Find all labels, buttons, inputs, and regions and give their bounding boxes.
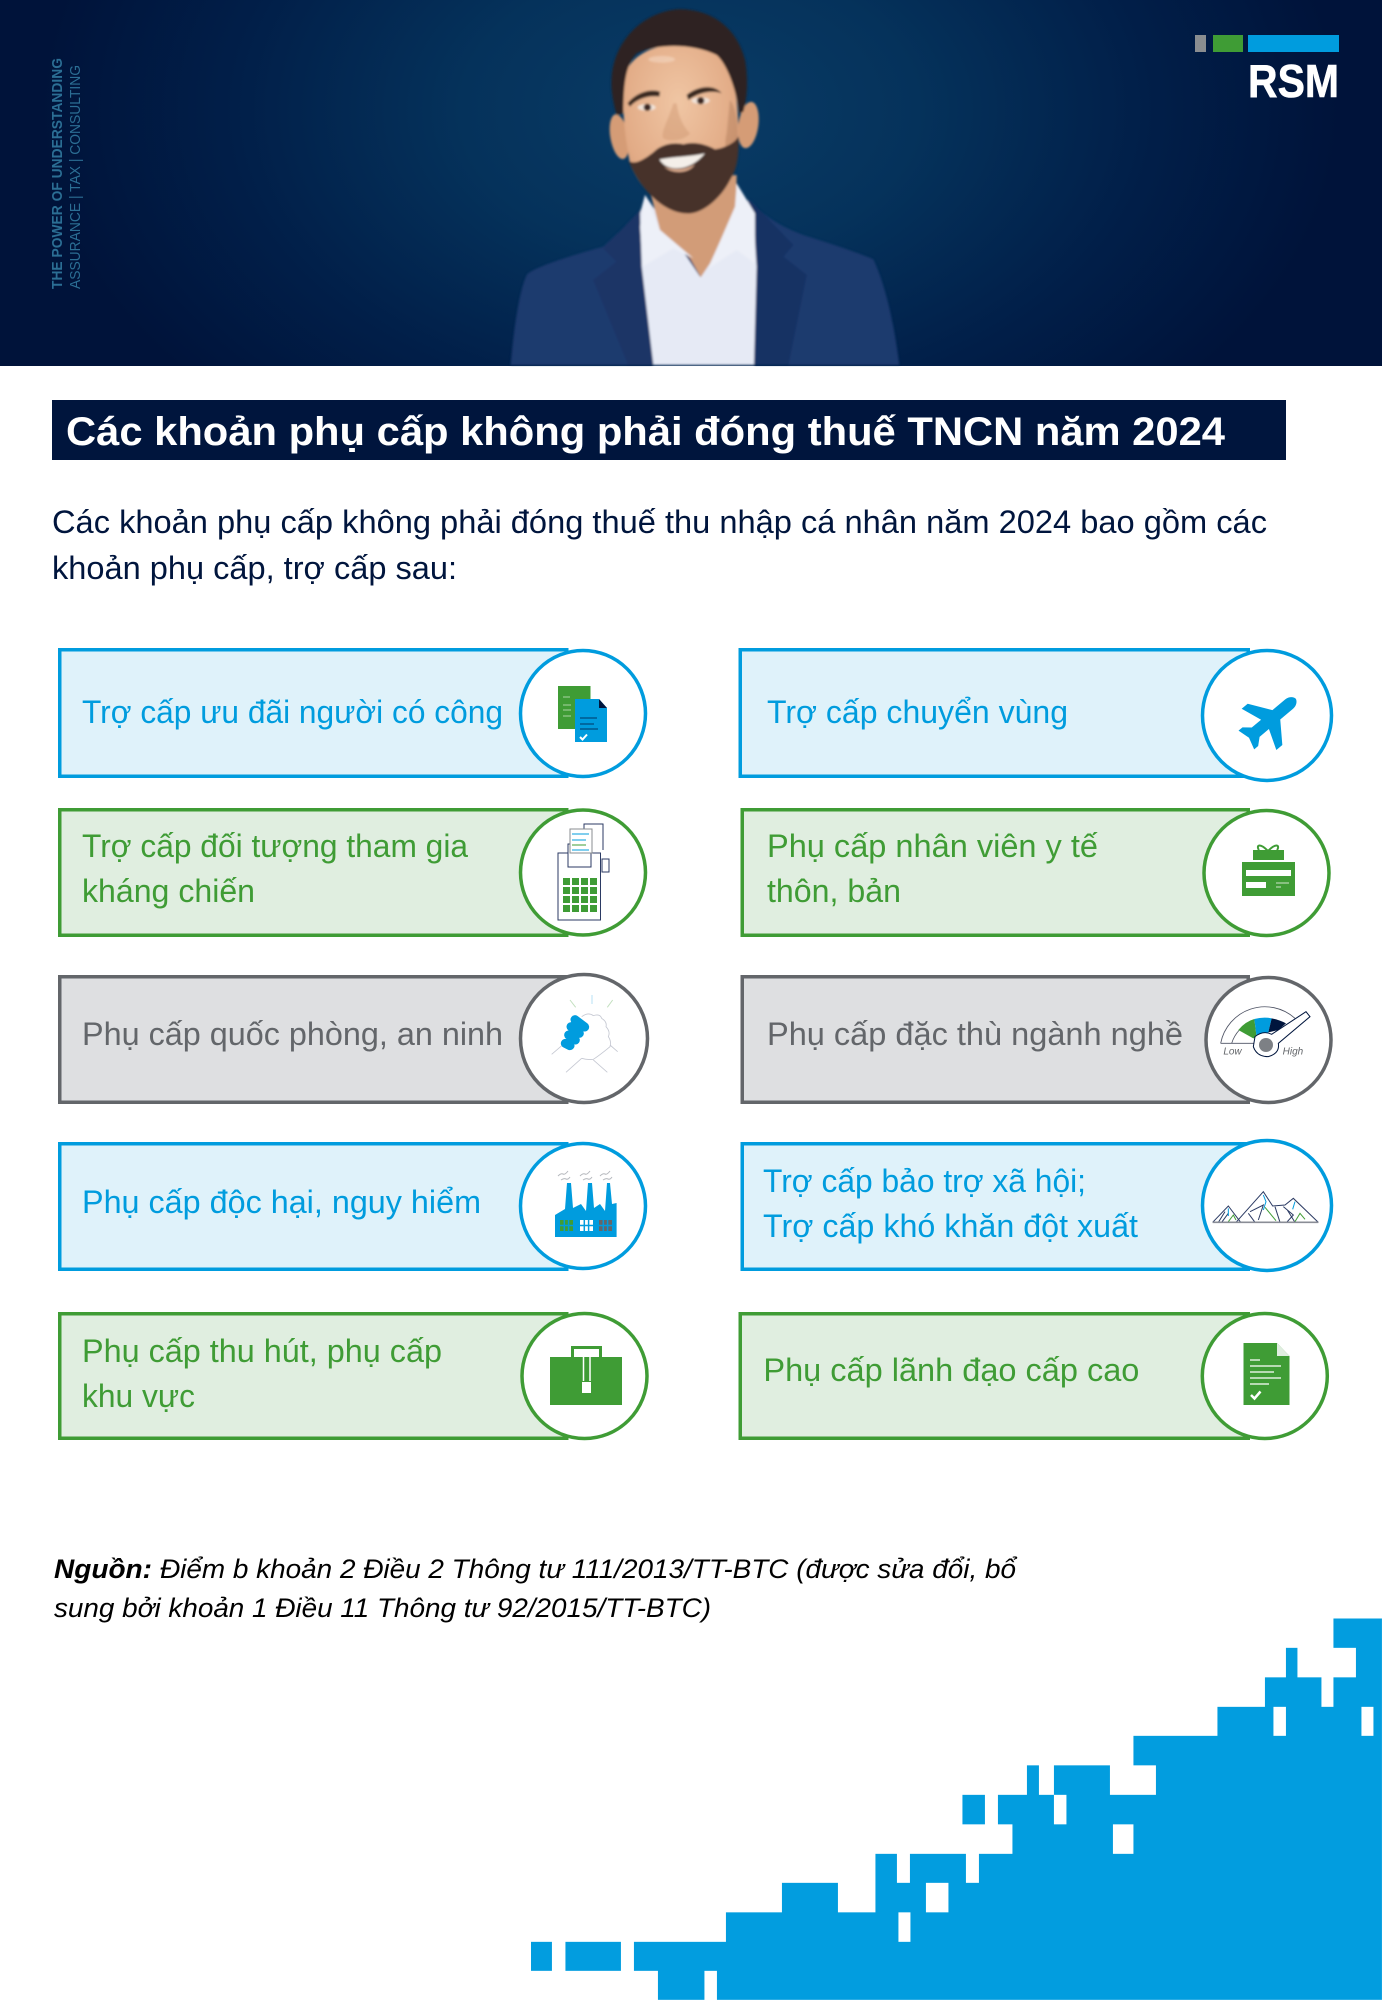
title: Các khoản phụ cấp không phải đóng thuế TNCN năm 2024 <box>66 410 1226 454</box>
icon: receipt calculator <box>558 824 609 920</box>
icon: document with check <box>1244 1343 1290 1405</box>
intro text: Các khoản phụ cấp không phải đóng thuế thu nhập cá nhân năm 2024 bao gồm các <box>52 504 1267 540</box>
card: Phụ cấp lãnh đạo cấp cao: Phụ cấp lãnh đạo cấp cao <box>763 1352 1139 1388</box>
intro text <box>52 504 1267 586</box>
tagline vertical text <box>49 58 84 289</box>
icon: handshake fist <box>552 995 618 1072</box>
card: Trợ cấp bảo trợ xã hội; Trợ cấp khó khăn đột xuất: Trợ cấp khó khăn đột xuất <box>763 1208 1138 1244</box>
card: Trợ cấp ưu đãi người có công: Trợ cấp ưu đãi người có công <box>82 694 503 730</box>
card: Phụ cấp thu hút, phụ cấp khu vực: khu vực <box>82 1378 195 1414</box>
icon: gauge low to high <box>1221 1007 1310 1057</box>
card: Trợ cấp chuyển vùng <box>740 650 1332 780</box>
source note: Điểm b khoản 2 Điều 2 Thông tư 111/2013/TT-BTC (được sửa đổi, bổ <box>160 1554 1018 1584</box>
header banner <box>0 0 1382 366</box>
card: Phụ cấp độc hại, nguy hiểm <box>60 1144 646 1269</box>
card: Phụ cấp nhân viên y tế thôn, bản: thôn, bản <box>767 873 901 909</box>
source note: sung bởi khoản 1 Điều 11 Thông tư 92/2015/TT-BTC) <box>54 1593 711 1623</box>
card: Phụ cấp quốc phòng, an ninh: Phụ cấp quốc phòng, an ninh <box>82 1016 503 1052</box>
icon: gift card <box>1242 846 1295 896</box>
card: Trợ cấp đối tượng tham gia kháng chiến: kháng chiến <box>82 873 255 909</box>
card: Phụ cấp độc hại, nguy hiểm: Phụ cấp độc hại, nguy hiểm <box>82 1184 481 1220</box>
card: Trợ cấp đối tượng tham gia kháng chiến <box>60 810 646 935</box>
icon: airplane <box>1229 678 1313 761</box>
icon: gauge low to high: Low <box>1223 1046 1242 1057</box>
card: Trợ cấp bảo trợ xã hội; Trợ cấp khó khăn đột xuất: Trợ cấp bảo trợ xã hội; <box>763 1163 1086 1199</box>
card: Phụ cấp thu hút, phụ cấp khu vực: Phụ cấp thu hút, phụ cấp <box>82 1333 442 1369</box>
card: Trợ cấp chuyển vùng: Trợ cấp chuyển vùng <box>767 694 1068 730</box>
card: Phụ cấp nhân viên y tế thôn, bản <box>742 810 1329 936</box>
icon: mountains <box>1213 1192 1318 1222</box>
tagline vertical text: THE POWER OF UNDERSTANDING <box>49 58 66 289</box>
icon: documents <box>558 686 607 742</box>
icon: gauge low to high: High <box>1283 1046 1304 1057</box>
decorative pixel staircase <box>531 1618 1382 2000</box>
portrait photo of smiling man in navy suit <box>511 9 899 365</box>
card: Trợ cấp ưu đãi người có công <box>60 650 646 776</box>
card: Trợ cấp bảo trợ xã hội; Trợ cấp khó khăn đột xuất <box>742 1140 1332 1270</box>
RSM logo <box>1195 35 1339 107</box>
card: Trợ cấp đối tượng tham gia kháng chiến: Trợ cấp đối tượng tham gia <box>82 828 468 864</box>
RSM logo: RSM <box>1248 55 1339 107</box>
source note: Nguồn: <box>54 1554 152 1584</box>
icon: factory <box>555 1171 617 1237</box>
icon: briefcase <box>550 1348 622 1405</box>
source note <box>54 1554 1018 1623</box>
tagline vertical text: ASSURANCE | TAX | CONSULTING <box>67 65 84 289</box>
card: Phụ cấp đặc thù ngành nghề <box>742 977 1331 1102</box>
card: Phụ cấp lãnh đạo cấp cao <box>740 1314 1327 1438</box>
card: Phụ cấp nhân viên y tế thôn, bản: Phụ cấp nhân viên y tế <box>767 828 1098 864</box>
card: Phụ cấp thu hút, phụ cấp khu vực <box>60 1314 647 1438</box>
intro text: khoản phụ cấp, trợ cấp sau: <box>52 550 457 586</box>
card: Phụ cấp đặc thù ngành nghề: Phụ cấp đặc thù ngành nghề <box>767 1016 1183 1052</box>
card: Phụ cấp quốc phòng, an ninh <box>60 974 648 1102</box>
title <box>52 400 1286 460</box>
